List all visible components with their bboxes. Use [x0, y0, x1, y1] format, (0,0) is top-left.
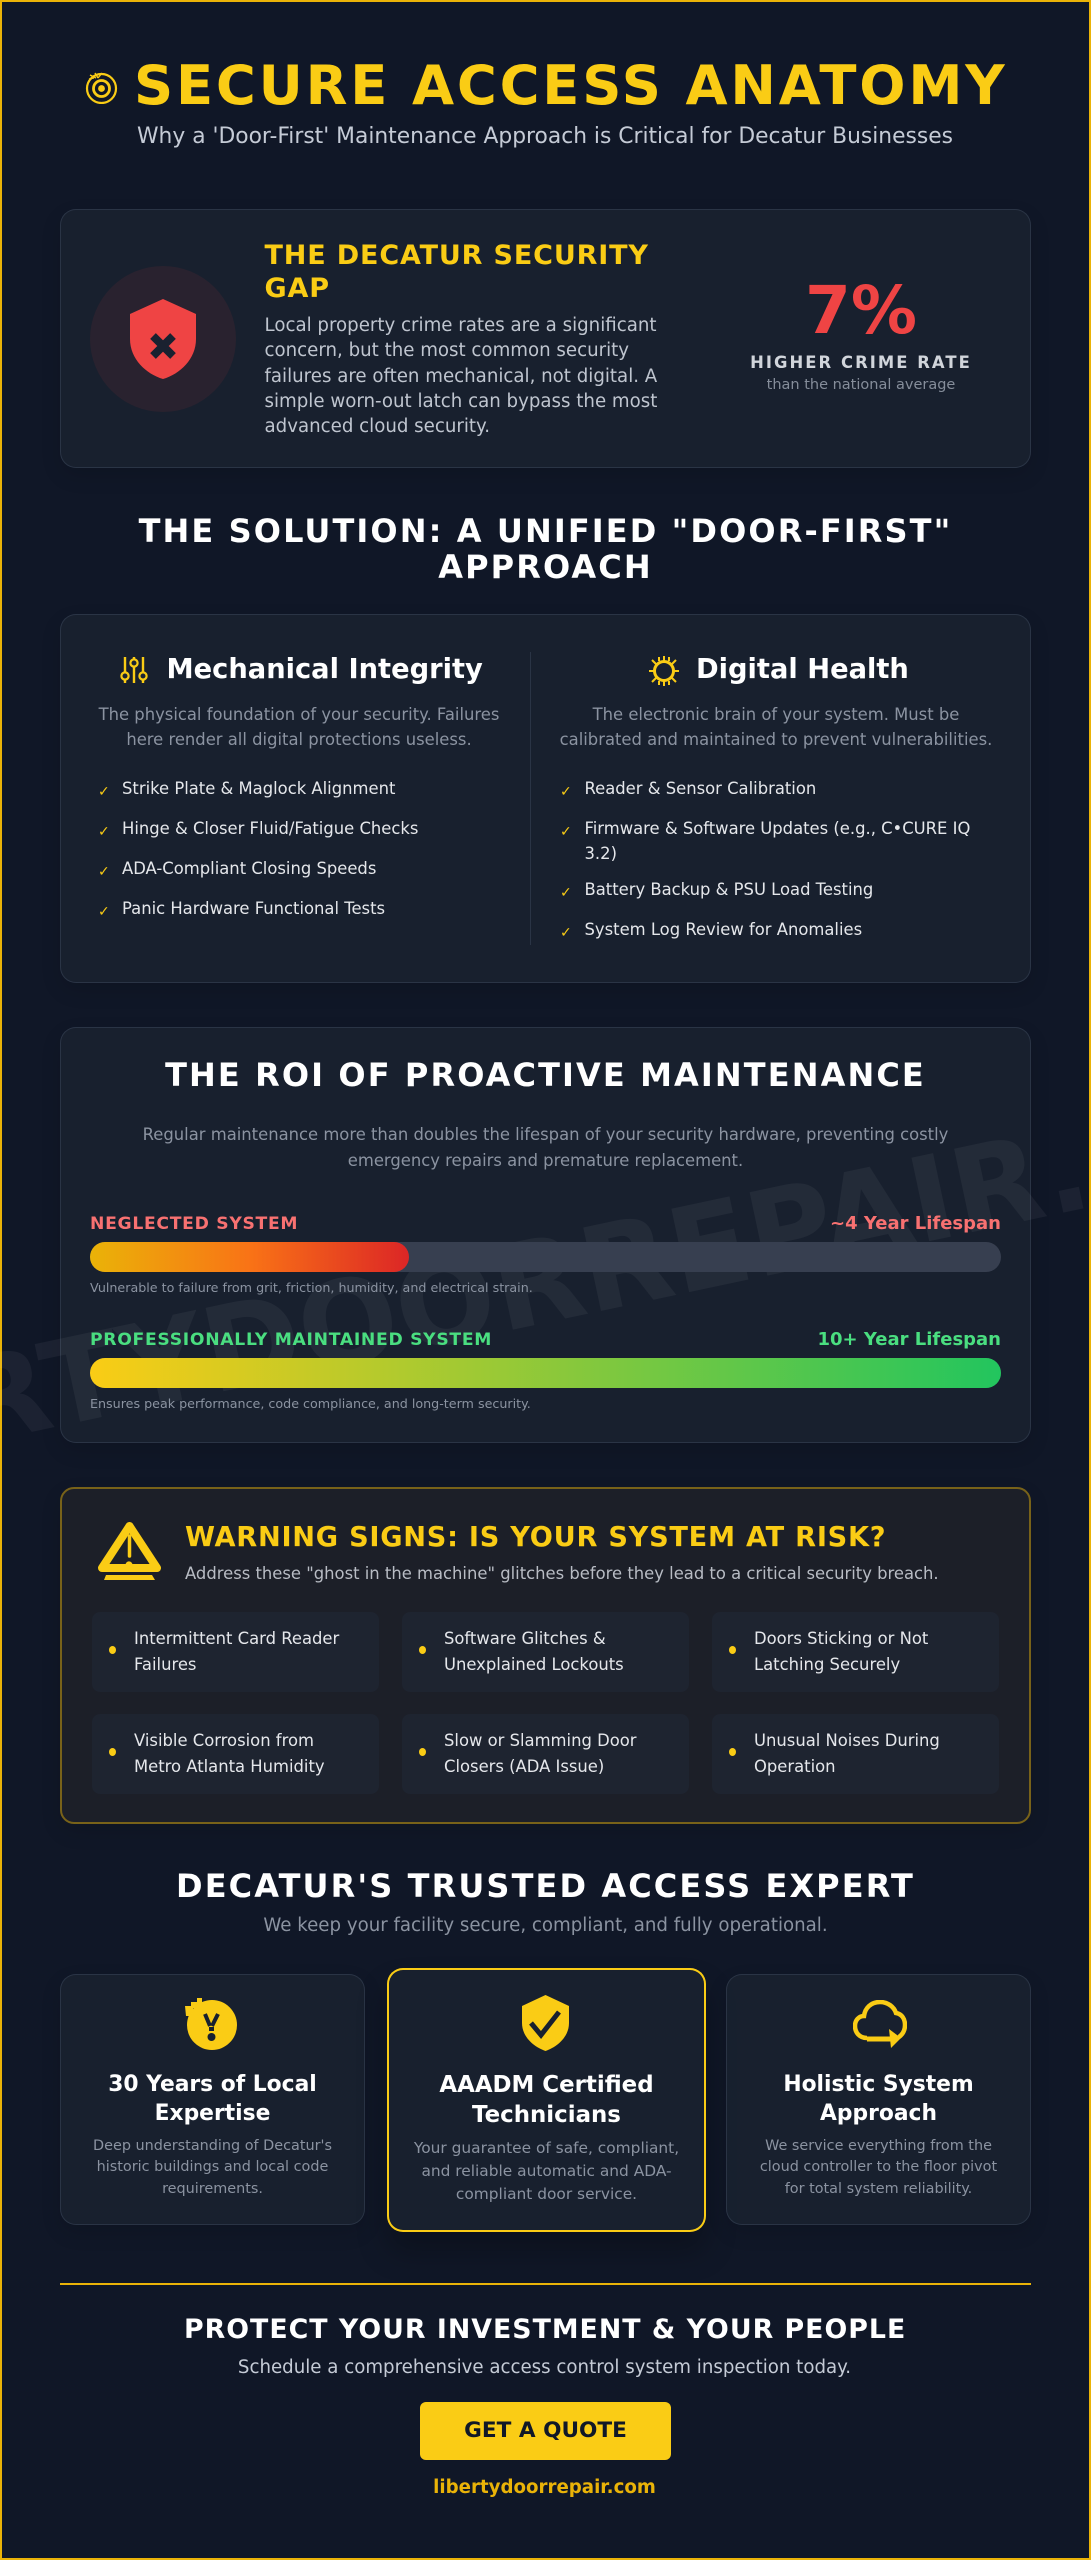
checklist: digital: ✓: [560, 924, 572, 940]
checklist: mechanical: Hinge & Closer Fluid/Fatigue Checks: [122, 818, 418, 838]
stat note: than the national average: [767, 377, 955, 393]
body text: failures are often mechanical, not digital. A: [264, 366, 657, 387]
description: mechanical: The physical foundation of your security. Failures: [99, 705, 499, 724]
panel: roi: [60, 1027, 1031, 1443]
label: NEGLECTED SYSTEM: [90, 1214, 298, 1234]
checklist: mechanical: ✓: [98, 904, 110, 920]
bar track: [90, 1358, 1001, 1388]
icon: chip sun: [649, 656, 679, 686]
card text: [93, 2138, 332, 2197]
icon: warning triangle: [98, 1522, 161, 1580]
body text: advanced cloud security.: [264, 416, 490, 437]
checklist: mechanical: ✓: [98, 784, 110, 800]
heading: decatur security gap: [264, 240, 649, 304]
heading: warning: WARNING SIGNS: IS YOUR SYSTEM AT RISK?: [185, 1522, 886, 1552]
tile: unusual noises: Unusual Noises During: [754, 1731, 940, 1750]
tile: card reader: [92, 1612, 379, 1692]
stat number: 7%: [805, 272, 917, 349]
checklist: digital: ✓: [560, 784, 572, 800]
tile: software glitches: [402, 1612, 689, 1692]
tile: doors sticking: Latching Securely: [754, 1655, 900, 1674]
divider: [530, 652, 531, 945]
body text: simple worn-out latch can bypass the most: [264, 391, 657, 412]
panel: warning signs: [60, 1487, 1031, 1824]
divider line: [60, 2283, 1031, 2285]
description: digital: [560, 705, 992, 749]
card title: Holistic System: [783, 2072, 974, 2096]
tile: door closers: Slow or Slamming Door: [444, 1731, 636, 1750]
icon: sliders: [120, 657, 148, 683]
heading: the solution: [138, 512, 952, 586]
card title: [108, 2072, 317, 2126]
heading: roi: THE ROI OF PROACTIVE MAINTENANCE: [165, 1056, 926, 1094]
description: digital: calibrated and maintained to prevent vulnerabilities.: [560, 730, 992, 749]
chart: neglected system: [90, 1212, 1001, 1295]
tile: door closers: [402, 1714, 689, 1794]
tile: corrosion: Metro Atlanta Humidity: [134, 1757, 325, 1776]
heading: decatur security gap: GAP: [264, 272, 330, 304]
bar fill: [90, 1358, 1001, 1388]
checklist: digital: ✓: [560, 824, 572, 840]
checklist: mechanical: Panic Hardware Functional Tests: [122, 898, 385, 918]
website link: libertydoorrepair.com: [433, 2477, 656, 2498]
checklist: mechanical: ✓: [98, 824, 110, 840]
tile: card reader: Failures: [134, 1655, 196, 1674]
title: SECURE ACCESS ANATOMY: [134, 54, 1007, 117]
checklist: digital: Reader & Sensor Calibration: [584, 778, 816, 798]
card text: [760, 2138, 997, 2197]
checklist: digital: [560, 778, 970, 940]
card text: [414, 2139, 679, 2203]
checklist: digital: ✓: [560, 884, 572, 900]
body text: Local property crime rates are a significant: [264, 315, 657, 336]
tile: door closers: Closers (ADA Issue): [444, 1757, 604, 1776]
checklist: digital: Firmware & Software Updates (e.g., C•CURE IQ: [584, 818, 970, 838]
label: PROFESSIONALLY MAINTAINED SYSTEM: [90, 1330, 492, 1350]
description: mechanical: here render all digital protections useless.: [126, 730, 472, 749]
cta heading: PROTECT YOUR INVESTMENT & YOUR PEOPLE: [184, 2314, 906, 2345]
card: local expertise: [60, 1974, 365, 2225]
stat label: HIGHER CRIME RATE: [750, 352, 972, 372]
card title: Approach: [820, 2100, 937, 2126]
description: roi: Regular maintenance more than doubles the lifespan of your security hardware, preventing costly: [143, 1125, 948, 1144]
header: [86, 54, 1007, 148]
heading: the solution: THE SOLUTION: A UNIFIED "DOOR-FIRST": [139, 512, 952, 550]
card text: for total system reliability.: [785, 2181, 972, 2197]
description: roi: emergency repairs and premature replacement.: [348, 1151, 743, 1170]
checklist: digital: System Log Review for Anomalies: [584, 920, 862, 938]
tile: unusual noises: [712, 1714, 999, 1794]
tile: corrosion: Visible Corrosion from: [134, 1731, 314, 1750]
panel: security gap: [60, 209, 1031, 468]
tile: doors sticking: Doors Sticking or Not: [754, 1629, 928, 1648]
icon: clock badge: [185, 1998, 237, 2050]
note: Vulnerable to failure from grit, friction, humidity, and electrical strain.: [90, 1280, 533, 1295]
body text: [264, 315, 657, 437]
card: aaadm certified: [387, 1968, 706, 2232]
tile: software glitches: Software Glitches &: [444, 1629, 606, 1648]
tile: software glitches: Unexplained Lockouts: [444, 1655, 624, 1674]
description: roi: [143, 1125, 948, 1170]
icon: target lock: [86, 72, 118, 104]
card text: We service everything from the: [765, 2138, 992, 2154]
panel: solution columns: [60, 614, 1031, 983]
icon: shield check: [522, 1995, 569, 2051]
tile: unusual noises: Operation: [754, 1757, 836, 1776]
checklist: digital: 3.2): [584, 844, 617, 863]
icon: red shield with x: [90, 266, 236, 412]
heading: decatur security gap: THE DECATUR SECURITY: [264, 240, 649, 270]
card title: Expertise: [155, 2100, 270, 2126]
card text: Deep understanding of Decatur's: [93, 2138, 332, 2154]
body text: concern, but the most common security: [264, 340, 629, 361]
checklist: digital: Battery Backup & PSU Load Testing: [584, 880, 873, 898]
note: Ensures peak performance, code compliance, and long-term security.: [90, 1396, 531, 1411]
card text: cloud controller to the floor pivot: [760, 2159, 997, 2175]
description: mechanical: [98, 705, 499, 749]
card text: Your guarantee of safe, compliant,: [414, 2139, 679, 2157]
heading: digital health: Digital Health: [696, 654, 909, 685]
subheading: warning: Address these "ghost in the machine" glitches before they lead to a critical security breach.: [185, 1564, 939, 1583]
card title: Technicians: [472, 2102, 621, 2128]
card: holistic approach: [726, 1974, 1031, 2225]
checklist: mechanical: ✓: [98, 864, 110, 880]
value: ~4 Year Lifespan: [830, 1212, 1001, 1234]
chart: maintained system: [90, 1328, 1001, 1411]
tile: corrosion: [92, 1714, 379, 1794]
cta section: [184, 2314, 906, 2498]
checklist: mechanical: Strike Plate & Maglock Alignment: [122, 778, 395, 798]
card text: compliant door service.: [456, 2185, 637, 2203]
heading: mechanical integrity: Mechanical Integrity: [166, 654, 483, 685]
card text: historic buildings and local code: [97, 2159, 328, 2175]
icon: cloud cycle: [853, 2000, 907, 2048]
heading: trusted expert: DECATUR'S TRUSTED ACCESS EXPERT: [176, 1867, 915, 1905]
card title: 30 Years of Local: [108, 2072, 317, 2096]
checklist: mechanical: ADA-Compliant Closing Speeds: [122, 858, 376, 878]
card text: requirements.: [162, 2181, 263, 2197]
tile: doors sticking: [712, 1612, 999, 1692]
tile: card reader: Intermittent Card Reader: [134, 1629, 339, 1648]
subtitle: Why a 'Door-First' Maintenance Approach is Critical for Decatur Businesses: [137, 124, 953, 148]
checklist: mechanical: [98, 778, 418, 920]
card text: and reliable automatic and ADA-: [421, 2162, 672, 2180]
description: digital: The electronic brain of your system. Must be: [593, 705, 959, 724]
value: 10+ Year Lifespan: [817, 1328, 1001, 1350]
card title: [439, 2072, 654, 2128]
heading: the solution: APPROACH: [438, 548, 653, 586]
subheading: trusted expert: We keep your facility secure, compliant, and fully operational.: [263, 1914, 828, 1936]
cta subheading: Schedule a comprehensive access control system inspection today.: [238, 2356, 851, 2378]
bar track: [90, 1242, 1001, 1272]
card title: [783, 2072, 974, 2126]
button: get a quote: [420, 2402, 671, 2460]
button: get a quote: GET A QUOTE: [464, 2418, 627, 2443]
bar fill: [90, 1242, 409, 1272]
stat: 7 percent: [750, 272, 972, 393]
card title: AAADM Certified: [439, 2072, 654, 2098]
